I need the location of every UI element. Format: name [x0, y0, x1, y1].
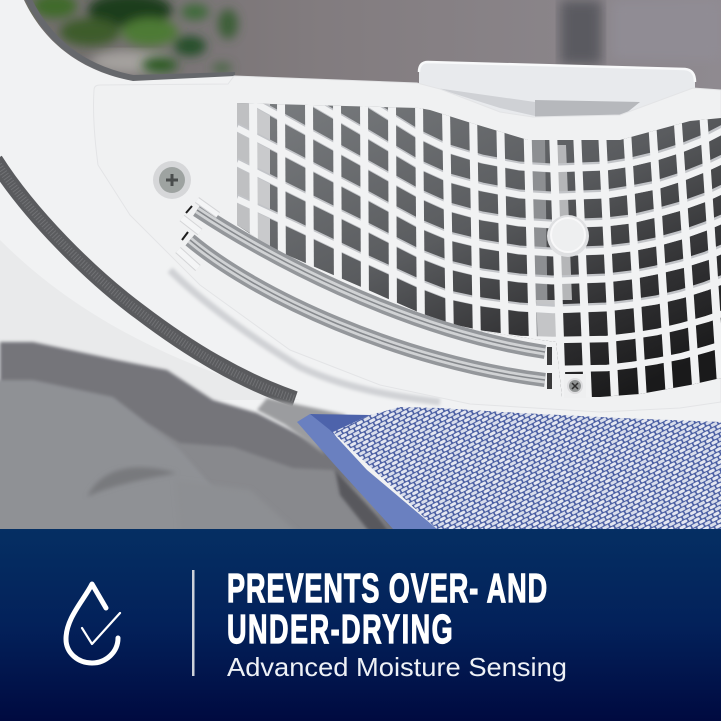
heading [227, 567, 547, 652]
grid shadow bars [270, 105, 721, 314]
grid vertical bars [253, 100, 721, 400]
small screw [564, 374, 586, 398]
subheading: Advanced Moisture Sensing [227, 652, 567, 682]
grid horizontal bars [237, 103, 721, 372]
vertical divider [192, 570, 194, 676]
shadow groove below plate [170, 270, 440, 402]
filter housing plate [94, 76, 721, 412]
door ring gasket [28, 0, 235, 78]
screen centre hub [547, 215, 589, 257]
white dryer door body [0, 0, 721, 529]
grey laundry [0, 342, 400, 535]
sensor end slots [547, 347, 552, 389]
metal sensor rails [178, 200, 545, 380]
lint screen grid [237, 103, 721, 397]
felt seal [0, 160, 295, 399]
blue towel [297, 407, 721, 529]
filter tab [419, 62, 695, 120]
background: blurred wall and plant [0, 0, 721, 110]
heading: PREVENTS OVER- AND [227, 567, 547, 611]
mounting screw [153, 161, 191, 199]
icon: water drop with checkmark [66, 584, 120, 663]
door lower-left tone [0, 240, 300, 400]
banner background [0, 529, 721, 721]
heading: UNDER-DRYING [227, 608, 453, 652]
